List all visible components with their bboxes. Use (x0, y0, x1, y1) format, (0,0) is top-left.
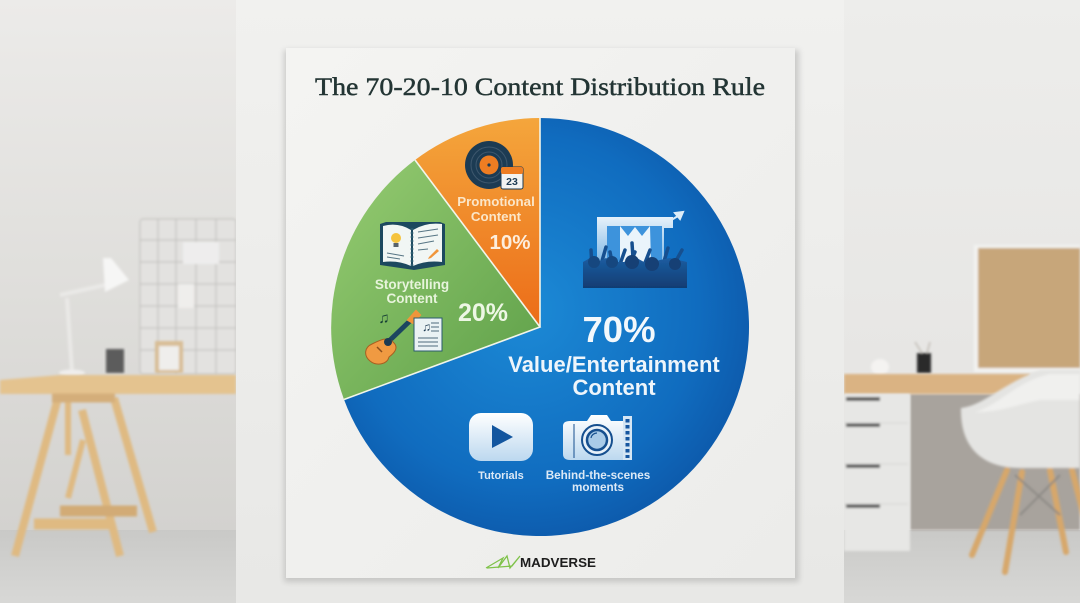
slice: orange 10% (415, 118, 540, 327)
picture frame (155, 341, 183, 373)
label: tutorials: Tutorials (478, 470, 524, 482)
label: value/entertainment content: Value/Entertainment (508, 352, 720, 377)
logo: Madverse: MADVERSE (520, 556, 596, 570)
icon: camera with film strip (563, 415, 632, 460)
label: 70%: 70% (582, 309, 656, 350)
poster shadow (284, 50, 799, 582)
label: storytelling content: Storytelling (375, 277, 449, 292)
label: promotional content (457, 194, 535, 224)
icon: concert crowd on stage (583, 212, 687, 288)
center wall panel (236, 0, 844, 603)
right desk (844, 374, 1030, 394)
wooden desk (0, 375, 236, 556)
wire memo grid (140, 219, 236, 374)
label: behind-the-scenes moments: Behind-the-scenes (546, 469, 651, 482)
icon: vinyl record and calendar (465, 141, 523, 189)
icon: tutorials play button (469, 413, 533, 461)
label: storytelling content: Content (386, 291, 438, 306)
label: value/entertainment content: Content (572, 375, 656, 400)
desk lamp (59, 258, 129, 376)
right room background (844, 0, 1080, 603)
icon: guitar and sheet music (366, 310, 442, 364)
slice: green 20% (331, 160, 540, 400)
drawer unit (844, 394, 910, 551)
label: value/entertainment content (508, 352, 720, 400)
left room background (0, 0, 236, 603)
label: behind-the-scenes moments (546, 469, 651, 494)
label: promotional content: Content (471, 209, 522, 224)
label: 20%: 20% (458, 299, 508, 327)
pie chart (331, 118, 749, 536)
icon: guitar and sheet music: ♫ (378, 310, 390, 327)
white chair (961, 370, 1080, 572)
label: behind-the-scenes moments: moments (572, 481, 624, 494)
label: 10%: 10% (489, 231, 531, 254)
pen holder (106, 349, 124, 373)
label: storytelling content (375, 277, 449, 306)
cork board (974, 245, 1080, 372)
slice: blue 70% (344, 118, 749, 536)
icon: open book (380, 222, 445, 270)
label: promotional content: Promotional (457, 194, 535, 209)
logo: Madverse (486, 556, 596, 570)
poster (286, 48, 795, 578)
icon: vinyl record and calendar: 23 (506, 176, 518, 188)
title: The 70-20-10 Content Distribution Rule (315, 72, 765, 101)
desk items (871, 342, 931, 375)
icon: guitar and sheet music: ♫ (422, 320, 431, 334)
